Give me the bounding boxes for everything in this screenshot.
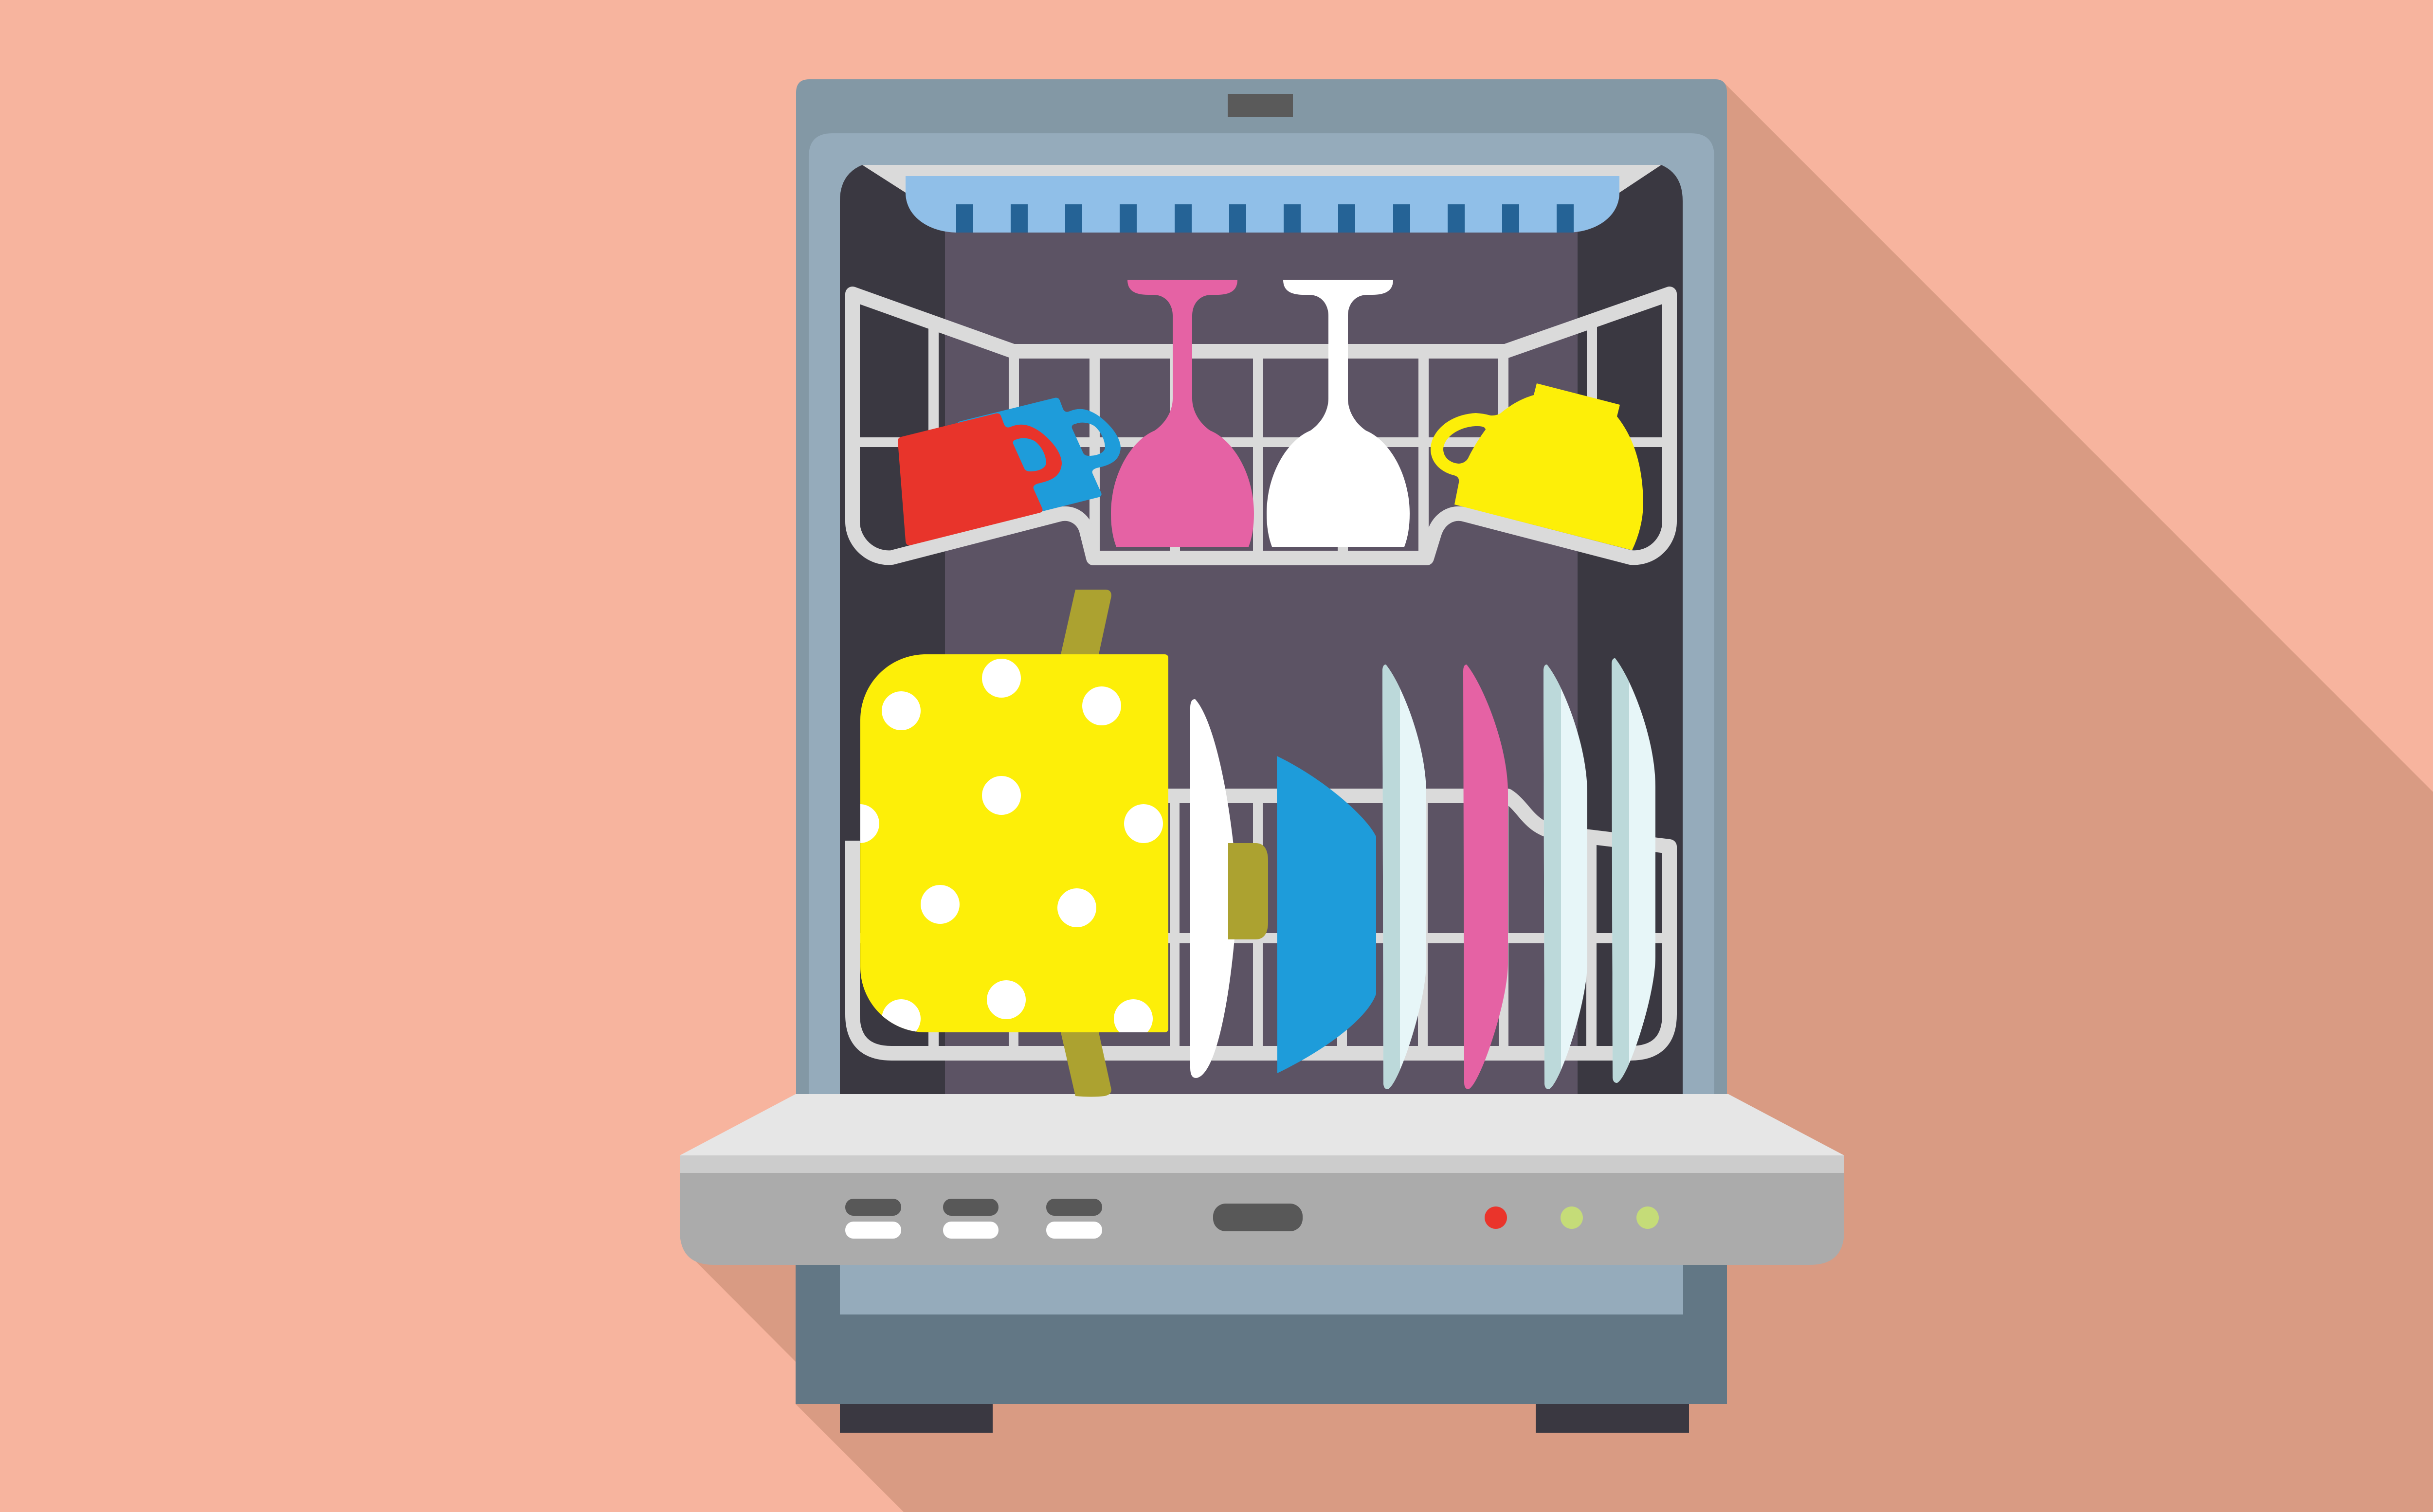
upper rack bbox=[853, 294, 1670, 558]
polka dot cutting board bbox=[840, 654, 1168, 1038]
top latch bbox=[1228, 94, 1293, 117]
feet bbox=[840, 1404, 1689, 1433]
indicator lights bbox=[1485, 1206, 1659, 1229]
lower rack bbox=[853, 796, 1670, 1053]
white plate bbox=[1190, 699, 1237, 1078]
teal plate 1 bbox=[1382, 665, 1426, 1089]
control panel bbox=[680, 1173, 1844, 1265]
teal plate 2 bbox=[1543, 665, 1587, 1089]
door top surface bbox=[680, 1094, 1844, 1155]
lower door panel bbox=[840, 1260, 1683, 1314]
door inner trim bbox=[680, 1155, 1844, 1173]
cabinet body bbox=[796, 79, 1727, 1404]
olive bowl foot bbox=[1228, 843, 1268, 939]
sprayer arm bbox=[862, 165, 1661, 233]
yellow mug bbox=[1431, 383, 1643, 550]
illustration: open dishwasher bbox=[680, 79, 2433, 1512]
door handle button bbox=[1213, 1204, 1303, 1231]
long shadow bbox=[692, 82, 2433, 1512]
pink plate bbox=[1463, 665, 1508, 1089]
cutting board handle bbox=[1061, 590, 1111, 1097]
inner door panel bbox=[809, 133, 1714, 1119]
blue mug bbox=[957, 398, 1121, 530]
blue bowl bbox=[1277, 756, 1376, 1073]
red mug bbox=[898, 414, 1062, 545]
pink wine glass bbox=[1111, 280, 1254, 547]
teal plate 3 bbox=[1612, 658, 1655, 1083]
tub interior bbox=[840, 165, 1683, 1119]
program buttons bbox=[845, 1199, 1102, 1239]
white wine glass bbox=[1267, 280, 1410, 547]
